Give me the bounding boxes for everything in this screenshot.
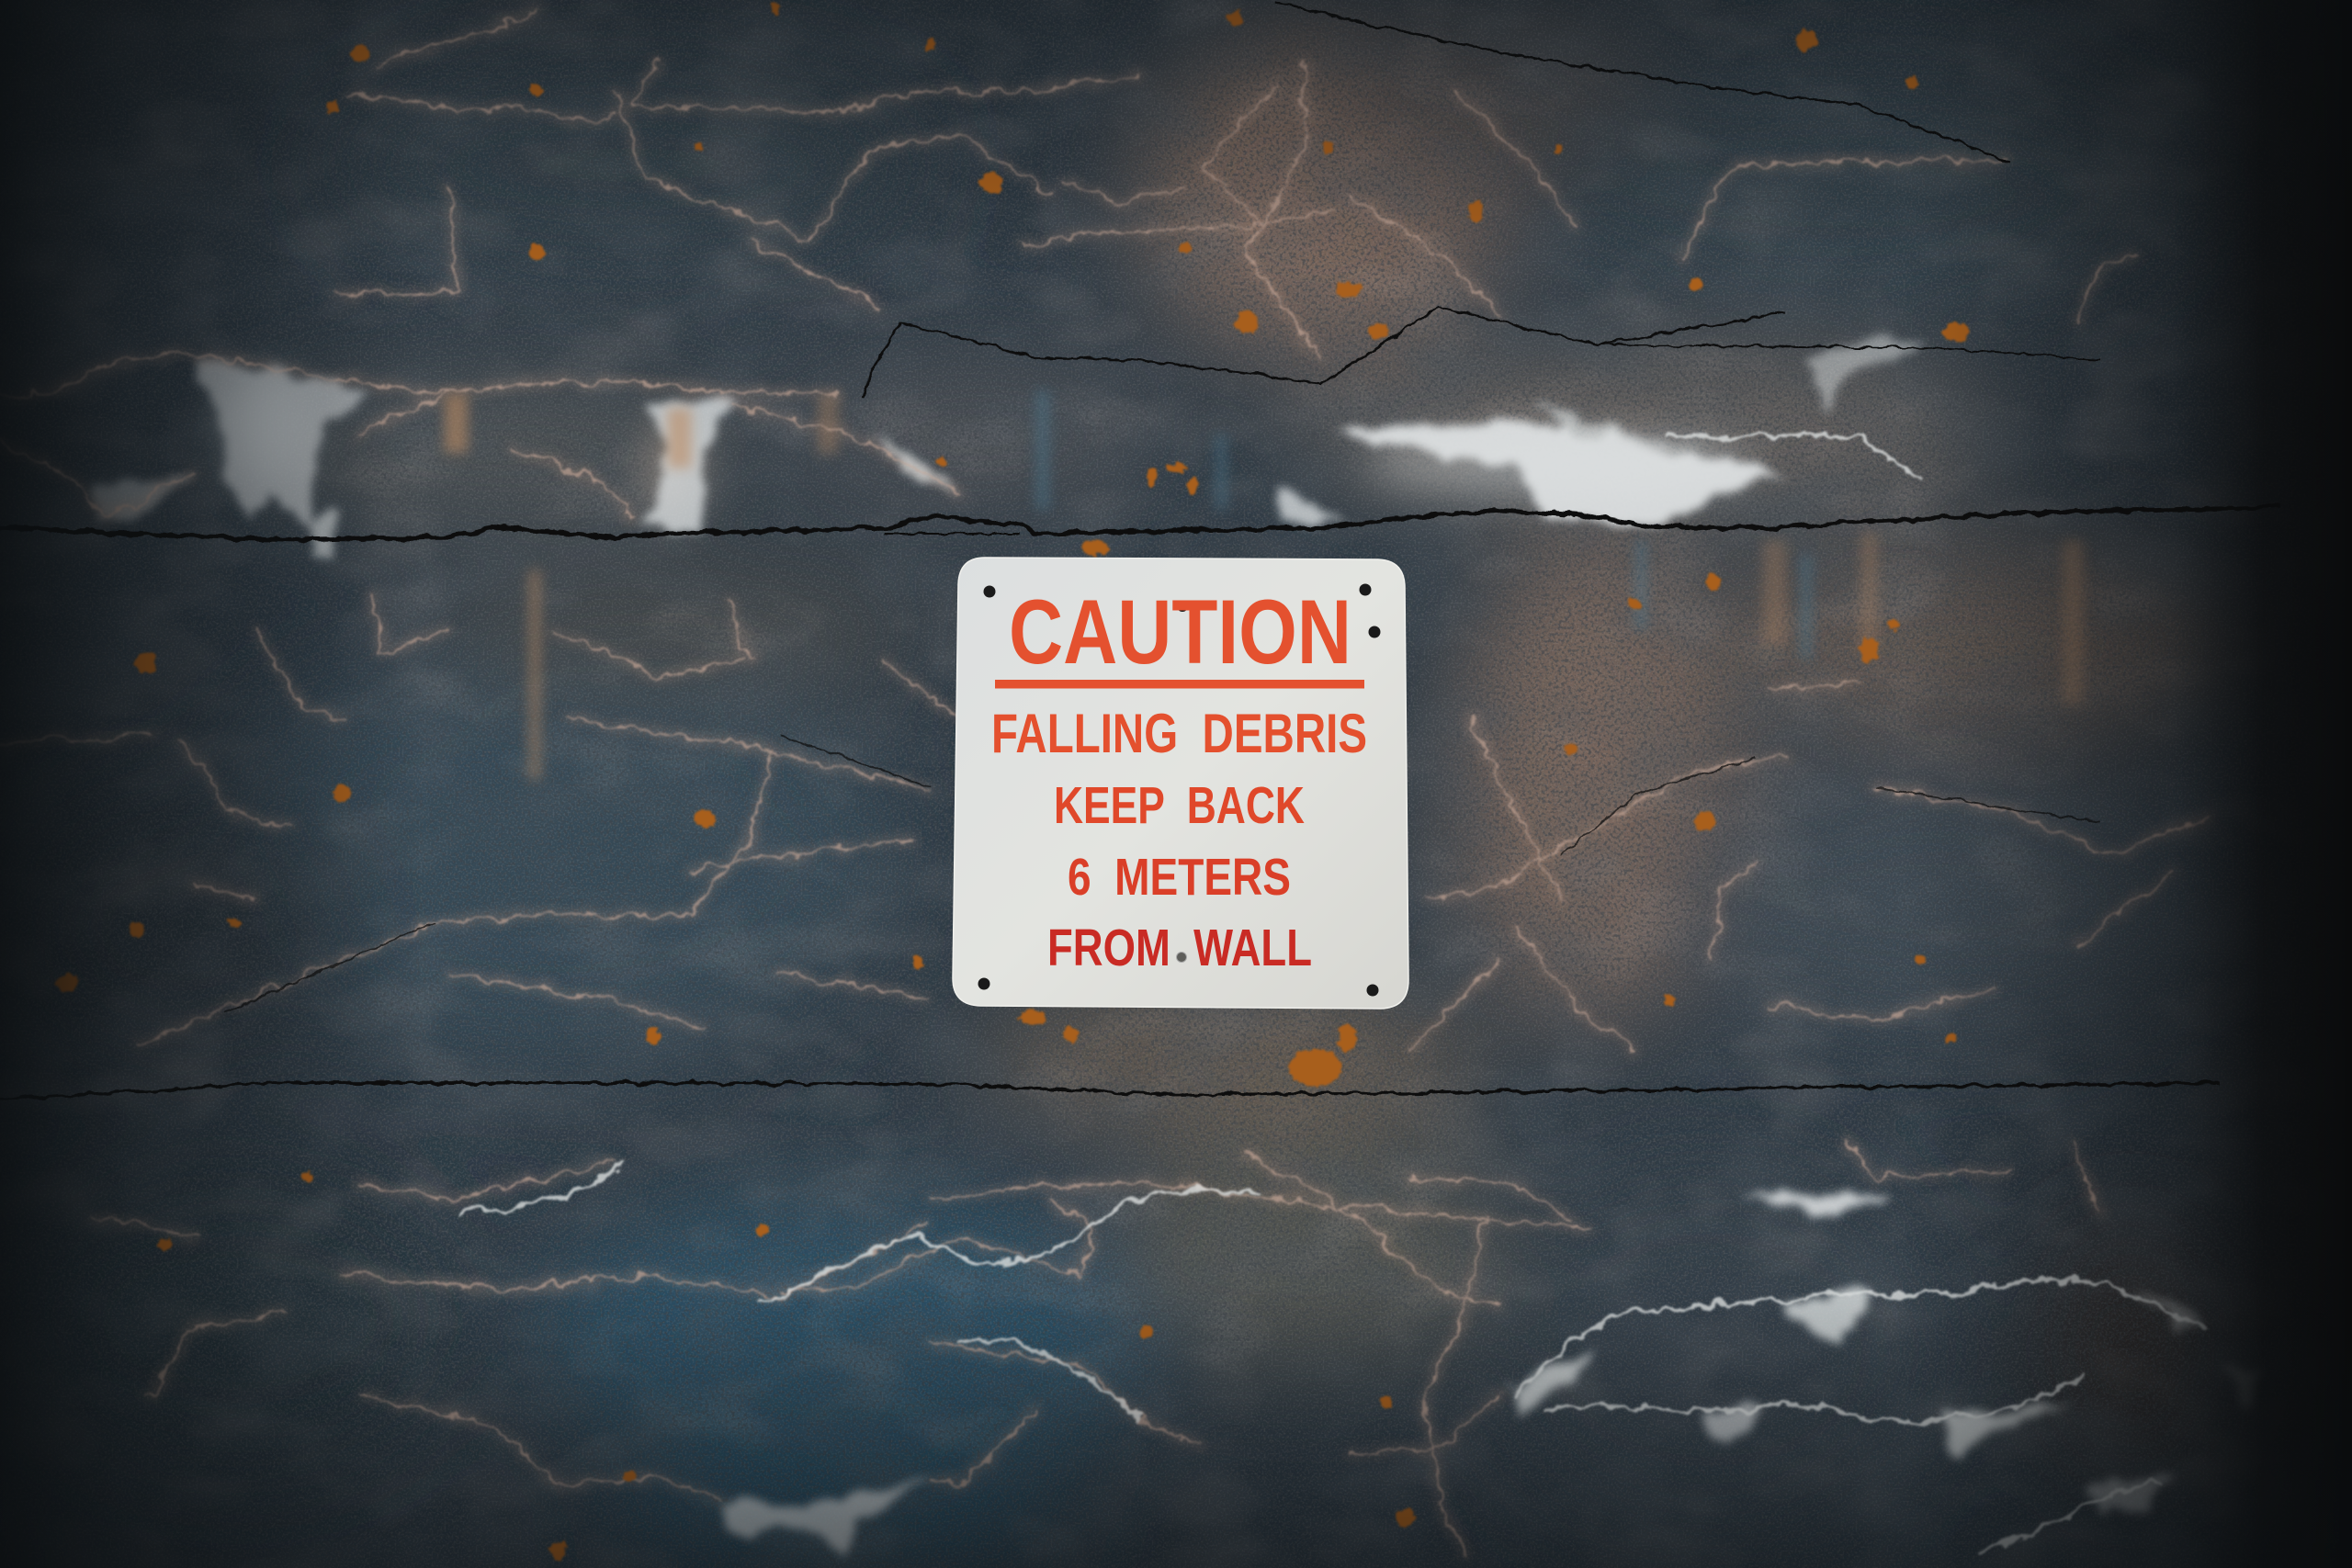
text: FALLING DEBRIS: FALLING DEBRIS: [991, 703, 1367, 764]
caution sign: [953, 558, 1408, 1009]
heading: CAUTION: CAUTION: [1009, 581, 1351, 682]
mounting holes: [978, 584, 1380, 996]
deep horizontal cracks: [0, 3, 2280, 1100]
text: FROM WALL: FROM WALL: [1047, 919, 1312, 977]
stains and white mineral streaks: [90, 340, 2265, 1553]
text: 6 METERS: 6 METERS: [1068, 848, 1291, 907]
sign plate: [953, 558, 1408, 1009]
text: KEEP BACK: KEEP BACK: [1054, 776, 1305, 835]
divider rule: [995, 680, 1364, 689]
